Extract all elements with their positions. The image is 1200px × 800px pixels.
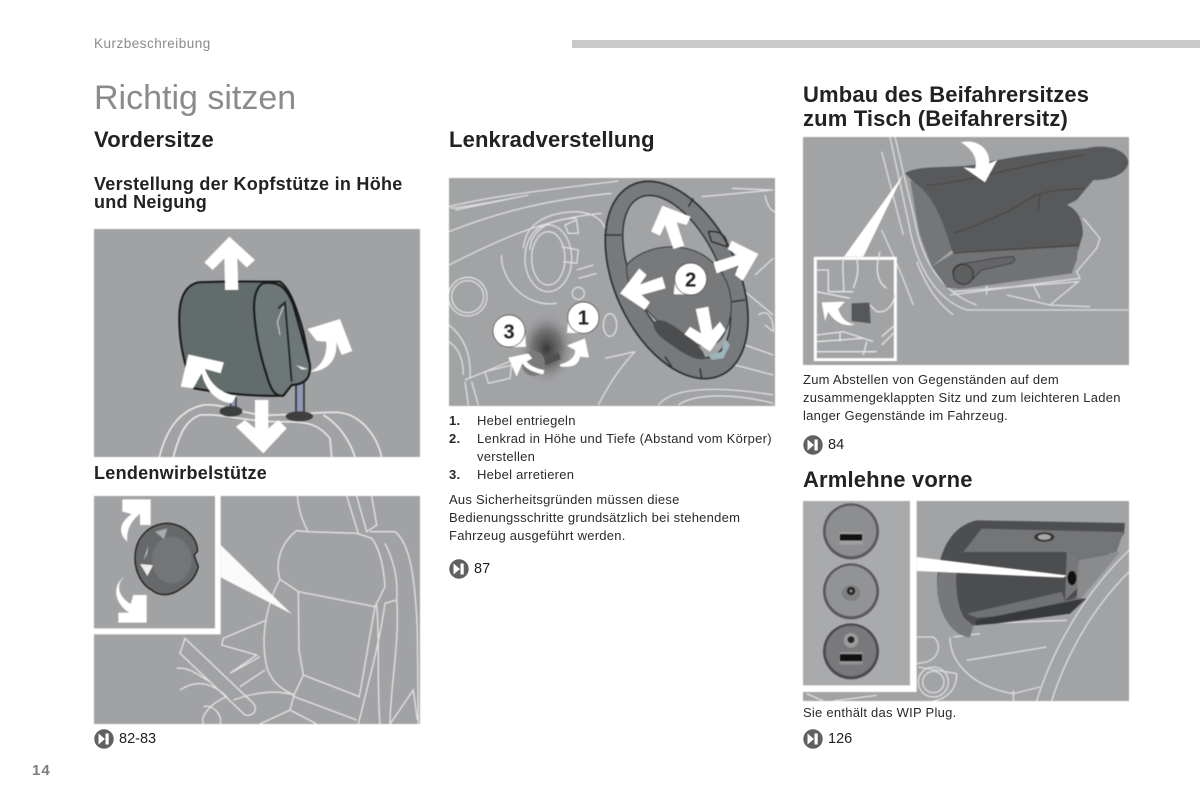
description: Sie enthält das WIP Plug. [803,705,956,720]
title: Richtig sitzen [94,79,296,117]
inset frame [815,252,895,360]
subheading: Lendenwirbelstütze: Lendenwirbelstütze [94,463,267,483]
page reference 84: 84 [828,437,844,453]
seat outline [159,405,382,457]
arrow: down [116,576,147,623]
heading: Lenkradverstellung: Lenkradverstellung [449,127,655,152]
heading: Armlehne: Armlehne vorne [803,467,973,492]
dashboard lines [807,550,1129,701]
arrow: wheel right [713,241,758,281]
image: fold seat [802,136,1130,366]
socket: combined [823,623,879,679]
arrow: down [236,400,287,453]
description: langer Gegenstände im Fahrzeug. [803,408,1008,423]
heading: Vordersitze: Vordersitze [94,127,214,152]
inset frame [803,501,910,685]
step 3: 3. [449,467,460,482]
subheading: Kopfstütze: und Neigung [94,192,207,212]
arrow: up [204,237,255,290]
step 3: Hebel arretieren [477,467,574,482]
heading: Umbau: Umbau des Beifahrersitzes [803,82,1089,107]
open compartment [937,520,1125,637]
arrow: fold down [961,141,997,182]
arrow: up [121,499,151,542]
panel: Umbau des Beifahrersitzes [802,82,1130,455]
pointer wedge [917,557,1067,578]
socket: USB [823,503,879,559]
image: lumbar adjustment [94,496,420,724]
steps list [449,413,772,482]
dashboard lines [448,181,775,405]
folded seat [905,147,1128,289]
arrow: tilt back [181,354,237,403]
headrest posts [220,382,313,421]
panel: Lenkradverstellung [448,127,776,579]
steering wheel [576,159,777,401]
callout 3: 3 [503,321,515,343]
pointer wedge [221,545,292,614]
description [803,372,1121,423]
image: steering wheel adjustment [448,178,776,406]
image: headrest adjustment [94,228,420,458]
lever shadow [518,312,575,385]
arrow: wheel down [684,307,726,352]
arrow: tilt forward [307,319,352,372]
inset border [803,501,917,692]
safety note [449,492,740,543]
step 2 [449,431,772,464]
callout 3 [493,315,526,347]
page reference 126: 126 [828,731,852,747]
safety note: Aus Sicherheitsgründen müssen diese [449,492,680,507]
heading: Umbau [803,82,1089,131]
arrow: lever release [560,338,589,367]
page reference 82-83 [94,729,156,749]
safety note: Fahrzeug ausgeführt werden. [449,528,626,543]
floor and door lines [882,137,1128,315]
description: Zum Abstellen von Gegenständen auf dem [803,372,1059,387]
lumbar knob [135,523,198,595]
page reference 82-83: 82-83 [119,731,156,747]
page reference 84 [803,435,844,455]
subheading: Kopfstütze [94,174,403,212]
page reference 87 [449,559,490,579]
pointer wedge [844,174,903,257]
safety note: Bedienungsschritte grundsätzlich bei stehendem [449,510,740,525]
step 2: verstellen [477,449,535,464]
page section label: Kurzbeschreibung [94,36,211,51]
callout 1 [567,302,599,333]
panel: Vordersitze [94,127,420,749]
page number: 14 [32,762,51,779]
seat lines [177,496,418,724]
callout 1: 1 [578,308,589,330]
lever [522,351,561,376]
step 2: 2. [449,431,460,446]
image: armrest sockets [802,500,1130,702]
step 1: Hebel entriegeln [477,413,576,428]
arrow: wheel up [651,206,691,249]
heading: Umbau: zum Tisch (Beifahrersitz) [803,106,1068,131]
description: zusammengeklappten Sitz und zum leichteren Laden [803,390,1121,405]
panel: Armlehne vorne [802,467,1130,749]
header bar [572,40,1200,48]
step 2: Lenkrad in Höhe und Tiefe (Abstand vom Körper) [477,431,772,446]
headrest [179,282,310,396]
step 1: 1. [449,413,460,428]
callout 2: 2 [685,269,696,291]
socket: jack [823,563,879,619]
subheading: Kopfstütze: Verstellung der Kopfstütze in Höhe [94,174,403,194]
arrow: wheel left [620,268,666,310]
inset frame [94,496,221,634]
page reference 87: 87 [474,561,490,577]
page reference 126 [803,729,852,749]
arrow: lever lock [508,353,544,377]
callout 2 [674,263,707,295]
